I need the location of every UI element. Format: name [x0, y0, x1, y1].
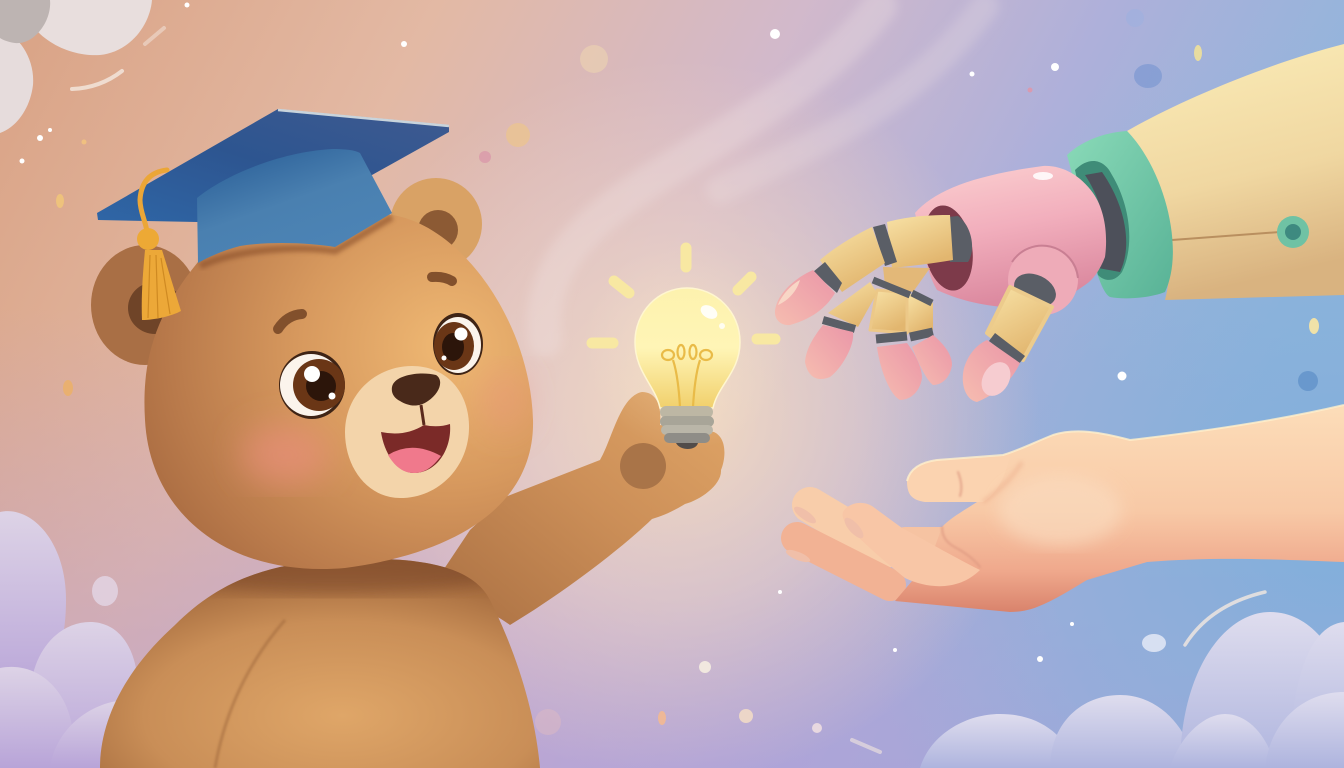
- curled finger stub: [905, 527, 950, 553]
- arm and palm: [895, 405, 1344, 612]
- mouth: [381, 405, 450, 473]
- light bulb: [635, 288, 740, 449]
- thumb crease shadow: [983, 462, 1022, 502]
- front finger: [843, 503, 980, 586]
- index finger: [775, 215, 972, 325]
- cheek blush: [241, 368, 527, 485]
- graduation cap: [97, 109, 449, 320]
- cap board top edge highlight: [278, 110, 449, 126]
- right eye: [433, 313, 483, 375]
- eyebrows: [278, 277, 452, 329]
- robot forearm: [1127, 44, 1344, 300]
- palm highlight: [1033, 172, 1053, 180]
- light rays: [592, 248, 775, 343]
- tassel cord: [140, 170, 167, 232]
- neck shadow: [218, 559, 480, 598]
- cap shadow on head: [200, 217, 392, 266]
- bear left arm crease: [215, 620, 285, 768]
- thumb: [907, 455, 1010, 502]
- left ear: [91, 245, 199, 365]
- cap board: [97, 109, 449, 222]
- cuff inner opening: [1075, 161, 1129, 280]
- bear: [91, 178, 724, 768]
- top rim highlight: [907, 405, 1344, 481]
- nose: [392, 374, 440, 406]
- pink palm: [915, 166, 1106, 308]
- tassel knob and fringe: [137, 228, 181, 320]
- palm highlight: [998, 474, 1122, 546]
- back of hand: [883, 267, 930, 292]
- wispy light swirls: [544, 6, 985, 340]
- bear body: [100, 559, 540, 768]
- bulb screw base: [660, 406, 714, 449]
- cap skull: [197, 149, 392, 263]
- left eye: [279, 351, 345, 419]
- cloud: top left: [0, 0, 152, 133]
- human hand and arm: [784, 405, 1344, 612]
- little finger: [908, 293, 952, 385]
- robot arm and hand: [775, 44, 1344, 402]
- dark wrist joint: [1085, 172, 1126, 272]
- muzzle: [345, 366, 469, 498]
- fingernails: [784, 504, 866, 565]
- light bulb glow: [582, 240, 792, 450]
- cloud: bottom left: [0, 511, 215, 768]
- filament: [662, 345, 712, 407]
- ring finger: [870, 280, 922, 400]
- palm opening: [917, 201, 979, 295]
- middle finger: [805, 282, 877, 379]
- back finger: [810, 505, 885, 550]
- forearm seam and button: [1172, 216, 1309, 248]
- cloud: bottom right: [920, 612, 1344, 768]
- paw pad: [620, 443, 666, 489]
- lower finger: [797, 538, 890, 585]
- green cuff ring: [1067, 131, 1173, 298]
- thumb: [963, 245, 1078, 402]
- bear head: [144, 211, 533, 569]
- finger separations: [942, 472, 980, 567]
- right ear: [390, 178, 482, 270]
- bear raised arm with paw: [430, 392, 724, 625]
